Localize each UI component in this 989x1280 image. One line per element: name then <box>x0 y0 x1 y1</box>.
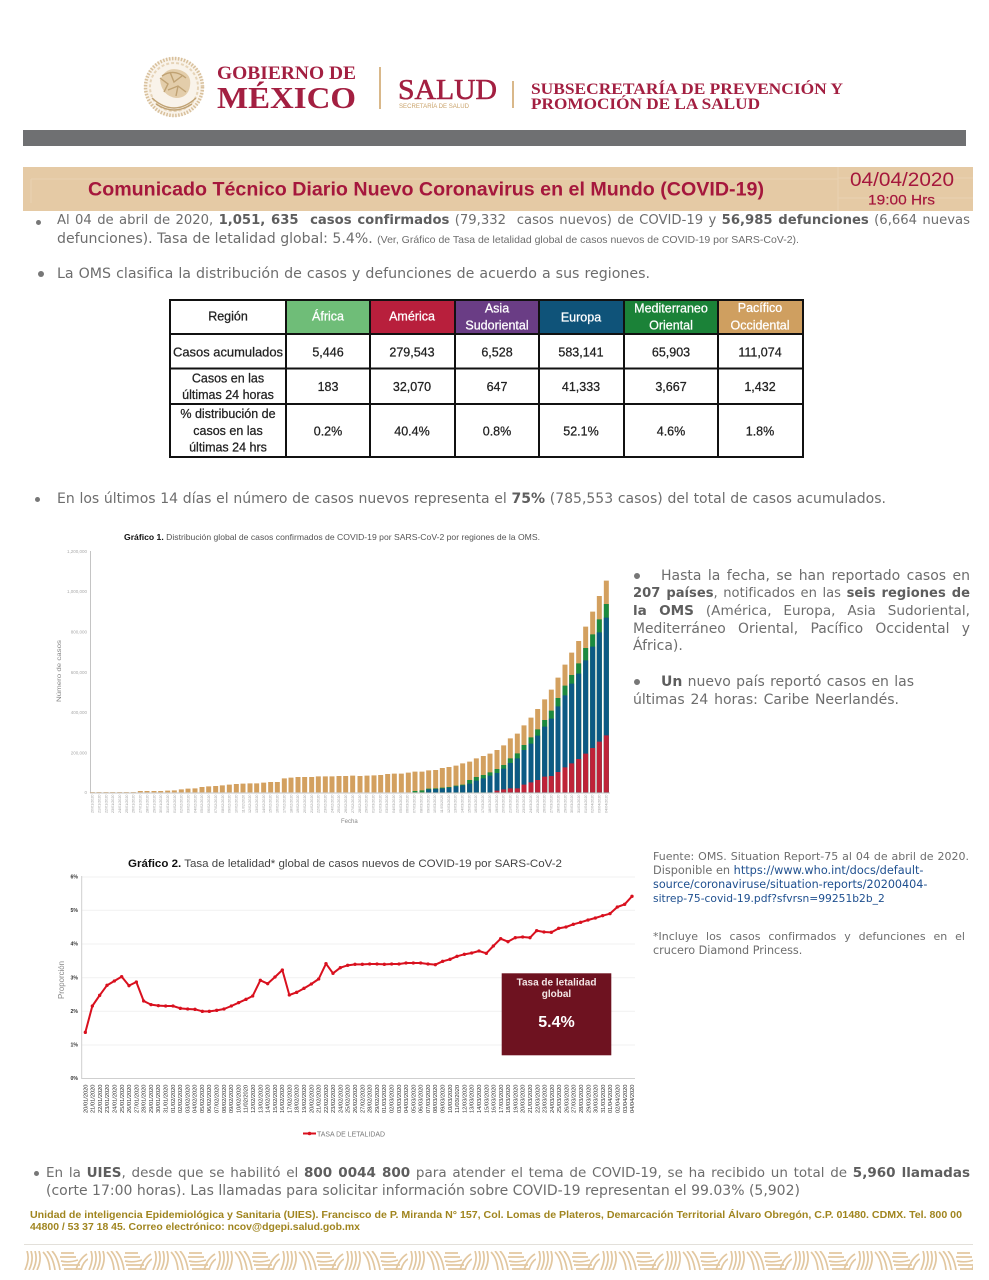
x axis date labels: 27/01/2020 <box>134 1085 140 1113</box>
x axis date labels: 23/03/2020 <box>543 1085 549 1113</box>
y axis labels: 600,000 <box>71 670 87 675</box>
x axis date labels: 25/03/2020 <box>557 1085 563 1113</box>
x axis date labels: 24/01/2020 <box>118 795 122 813</box>
gray bar <box>23 130 966 146</box>
x axis date labels: 22/03/2020 <box>535 1085 541 1113</box>
x axis date labels: 21/02/2020 <box>317 1085 323 1113</box>
x axis date labels: 18/02/2020 <box>289 795 293 813</box>
bullet text: global summary: Al 04 de abril de 2020, 1,051, 635 casos confirmados (79,332 casos nuevos) de COVID-19 y 56,985 defunciones (6,664 nuevas <box>57 213 970 228</box>
table header: Oriental <box>649 318 693 332</box>
x axis date labels: 24/02/2020 <box>330 795 334 813</box>
table row: casos acumulados: 583,141 <box>558 346 604 360</box>
footer: contact: 44800 / 53 37 18 45. Correo electrónico: ncov@dgepi.salud.gob.mx <box>30 1221 360 1233</box>
icon: national emblem <box>144 57 204 117</box>
x axis date labels: 29/01/2020 <box>149 1085 155 1113</box>
x axis date labels: 29/03/2020 <box>563 795 567 813</box>
x axis date labels: 15/02/2020 <box>269 795 273 813</box>
x axis date labels: 16/02/2020 <box>280 1085 286 1113</box>
logo: Gobierno de México: MÉXICO <box>217 80 356 115</box>
text block: source: Fuente: OMS. Situation Report-75 al 04 de abril de 2020. <box>653 850 969 863</box>
x axis date labels: 26/01/2020 <box>132 795 136 813</box>
x axis date labels: 14/02/2020 <box>266 1085 272 1113</box>
x axis date labels: 17/03/2020 <box>481 795 485 813</box>
x axis date labels: 29/02/2020 <box>365 795 369 813</box>
table row: casos acumulados <box>173 346 782 360</box>
x axis date labels: 21/01/2020 <box>91 1085 97 1113</box>
x axis date labels: 23/03/2020 <box>522 795 526 813</box>
x axis date labels: 06/02/2020 <box>207 795 211 813</box>
x axis date labels: 03/02/2020 <box>186 795 190 813</box>
x axis date labels: 30/01/2020 <box>156 1085 162 1113</box>
bullet text: OMS regions: La OMS clasifica la distribución de casos y defunciones de acuerdo a sus regiones. <box>57 266 650 282</box>
table row: casos acumulados: 279,543 <box>389 346 435 360</box>
x axis date labels: 04/02/2020 <box>193 795 197 813</box>
decorative band <box>24 1251 973 1270</box>
header logos <box>23 56 966 146</box>
x axis date labels: 12/03/2020 <box>447 795 451 813</box>
x axis date labels: 02/04/2020 <box>616 1085 622 1113</box>
x axis date labels: 29/01/2020 <box>152 795 156 813</box>
x axis date labels: 07/02/2020 <box>214 1085 220 1113</box>
x axis date labels: 16/03/2020 <box>474 795 478 813</box>
y axis labels: 6% <box>70 874 78 880</box>
x axis date labels: 11/03/2020 <box>440 795 444 813</box>
x axis date labels: 12/02/2020 <box>251 1085 257 1113</box>
x axis date labels: 24/02/2020 <box>338 1085 344 1113</box>
x axis date labels: 05/02/2020 <box>200 1085 206 1113</box>
x axis date labels: 30/03/2020 <box>594 1085 600 1113</box>
x axis date labels: 09/02/2020 <box>228 795 232 813</box>
table header: Sudoriental <box>465 318 529 332</box>
x axis date labels: 22/02/2020 <box>317 795 321 813</box>
x axis date labels: 07/03/2020 <box>413 795 417 813</box>
callout: global lethality: global <box>542 989 571 1000</box>
x axis date labels: 01/03/2020 <box>382 1085 388 1113</box>
x axis date labels <box>91 795 608 813</box>
text block: right column countries <box>633 568 970 654</box>
x axis date labels: 27/03/2020 <box>572 1085 578 1113</box>
x axis date labels: 05/03/2020 <box>399 795 403 813</box>
x axis date labels: 02/03/2020 <box>390 1085 396 1113</box>
callout: global lethality <box>502 973 611 1055</box>
x axis date labels: 18/03/2020 <box>488 795 492 813</box>
x axis date labels: 18/03/2020 <box>506 1085 512 1113</box>
x axis date labels: 20/03/2020 <box>502 795 506 813</box>
logo: Subsecretaría: SUBSECRETARÍA DE PREVENCIÓN Y <box>531 79 843 98</box>
x axis date labels: 11/02/2020 <box>241 795 245 813</box>
y axis labels: 2% <box>70 1009 78 1015</box>
x axis date labels <box>83 1085 636 1113</box>
x axis date labels: 31/01/2020 <box>164 1085 170 1113</box>
text block: source: source/coronaviruse/situation-reports/20200404- <box>653 878 927 891</box>
x axis date labels: 28/03/2020 <box>579 1085 585 1113</box>
table row: % distribución: casos en las <box>193 424 263 438</box>
x axis date labels: 30/01/2020 <box>159 795 163 813</box>
table header: África <box>312 308 344 324</box>
logo: Subsecretaría: PROMOCIÓN DE LA SALUD <box>531 94 760 113</box>
table row: últimas 24 horas: 183 <box>318 380 338 394</box>
table row: % distribución: 0.8% <box>483 424 511 438</box>
table: regions <box>169 299 804 458</box>
x axis date labels: 04/03/2020 <box>404 1085 410 1113</box>
x axis date labels: 10/02/2020 <box>236 1085 242 1113</box>
bullet text: UIES calls <box>34 1165 970 1199</box>
x axis date labels: 19/03/2020 <box>513 1085 519 1113</box>
table row: últimas 24 horas: 1,432 <box>744 380 776 394</box>
x axis date labels: 07/03/2020 <box>426 1085 432 1113</box>
x axis date labels: 11/03/2020 <box>455 1085 461 1113</box>
x axis date labels: 08/03/2020 <box>419 795 423 813</box>
x axis date labels: 22/03/2020 <box>515 795 519 813</box>
x axis date labels: 28/02/2020 <box>368 1085 374 1113</box>
x axis title: Fecha <box>341 819 358 825</box>
x axis date labels: 03/03/2020 <box>385 795 389 813</box>
table row: casos acumulados: 5,446 <box>312 346 344 360</box>
text block: right column countries: la OMS (América, Europa, Asia Sudoriental, <box>633 603 970 619</box>
x axis date labels: 12/02/2020 <box>248 795 252 813</box>
x axis date labels: 01/02/2020 <box>173 795 177 813</box>
x axis date labels: 29/03/2020 <box>586 1085 592 1113</box>
x axis date labels: 26/01/2020 <box>127 1085 133 1113</box>
x axis date labels: 29/02/2020 <box>375 1085 381 1113</box>
text block: source <box>653 850 969 905</box>
table row: últimas 24 horas: Casos en las <box>192 372 264 386</box>
x axis date labels: 31/03/2020 <box>577 795 581 813</box>
x axis date labels: 27/02/2020 <box>351 795 355 813</box>
x axis date labels: 08/02/2020 <box>222 1085 228 1113</box>
text block: right column new country <box>633 674 914 708</box>
x axis date labels: 06/02/2020 <box>207 1085 213 1113</box>
x axis date labels: 15/03/2020 <box>467 795 471 813</box>
text block: right column countries: Mediterráneo Oriental, Pacífico Occidental y <box>633 621 970 637</box>
x axis date labels: 24/03/2020 <box>550 1085 556 1113</box>
logo: Subsecretaría <box>531 79 843 113</box>
y axis title: Número de casos <box>56 639 63 702</box>
bullet text: UIES calls: En la UIES, desde que se habilitó el 800 0044 800 para atender el tema de COVID-19, se ha recibido un total de 5,960 llamadas <box>46 1165 970 1181</box>
table row: % distribución: % distribución de <box>180 407 276 421</box>
x axis date labels: 05/03/2020 <box>411 1085 417 1113</box>
x axis date labels: 13/02/2020 <box>258 1085 264 1113</box>
x axis date labels: 24/03/2020 <box>529 795 533 813</box>
text block: right column new country: últimas 24 horas: Caribe Neerlandés. <box>633 692 899 708</box>
x axis date labels: 30/03/2020 <box>570 795 574 813</box>
x axis date labels: 10/03/2020 <box>448 1085 454 1113</box>
x axis date labels: 23/02/2020 <box>324 795 328 813</box>
chart title: Gráfico 2. Tasa de letalidad* global de casos nuevos de COVID-19 por SARS-CoV-2 <box>128 858 562 870</box>
text block: right column new country: Un nuevo país reportó casos en las <box>661 674 914 690</box>
x axis date labels: 22/01/2020 <box>98 1085 104 1113</box>
x axis date labels: 23/02/2020 <box>331 1085 337 1113</box>
x axis date labels: 20/01/2020 <box>91 795 95 813</box>
chart title: Gráfico 1. Distribución global de casos confirmados de COVID-19 por SARS-CoV-2 por regiones de la OMS. <box>124 532 540 542</box>
y axis title: Proporción <box>57 961 66 999</box>
x axis date labels: 07/02/2020 <box>214 795 218 813</box>
table header: Región <box>208 310 248 324</box>
x axis date labels: 25/02/2020 <box>337 795 341 813</box>
text block: footnote: *Incluye los casos confirmados y defunciones en el <box>653 930 965 943</box>
x axis date labels: 11/02/2020 <box>244 1085 250 1113</box>
x axis date labels: 16/03/2020 <box>492 1085 498 1113</box>
table row: casos acumulados: 65,903 <box>652 346 690 360</box>
x axis date labels: 06/03/2020 <box>406 795 410 813</box>
table row: % distribución: 4.6% <box>657 424 685 438</box>
x axis date labels: 17/02/2020 <box>282 795 286 813</box>
x axis date labels: 18/02/2020 <box>295 1085 301 1113</box>
x axis date labels: 20/02/2020 <box>309 1085 315 1113</box>
footer: contact: Unidad de inteligencia Epidemiológica y Sanitaria (UIES). Francisco de P. Miranda N° 157, Col. Lomas de Plateros, Demarcación Territorial Álvaro Obregón, C.P. 01480. CDMX. Tel. 800 00 <box>30 1208 962 1221</box>
x axis date labels: 20/01/2020 <box>83 1085 89 1113</box>
title band <box>23 167 973 211</box>
logo: Salud: SALUD <box>398 74 497 106</box>
title: Comunicado Técnico Diario Nuevo Coronavirus en el Mundo (COVID-19) <box>88 178 764 200</box>
x axis date labels: 27/03/2020 <box>550 795 554 813</box>
x axis date labels: 03/02/2020 <box>185 1085 191 1113</box>
x axis date labels: 03/04/2020 <box>598 795 602 813</box>
x axis date labels: 10/02/2020 <box>234 795 238 813</box>
x axis date labels: 13/03/2020 <box>454 795 458 813</box>
table row: % distribución: 40.4% <box>394 424 430 438</box>
x axis date labels: 09/03/2020 <box>440 1085 446 1113</box>
x axis date labels: 19/02/2020 <box>302 1085 308 1113</box>
y axis labels: 3% <box>70 975 78 981</box>
y axis labels <box>67 549 87 795</box>
x axis date labels: 14/02/2020 <box>262 795 266 813</box>
table header <box>208 301 790 332</box>
date: 04/04/2020 <box>850 170 954 191</box>
x axis date labels: 01/04/2020 <box>608 1085 614 1113</box>
x axis date labels: 21/02/2020 <box>310 795 314 813</box>
x axis date labels: 28/01/2020 <box>142 1085 148 1113</box>
table row: casos acumulados: 6,528 <box>481 346 513 360</box>
table row: % distribución: 52.1% <box>563 424 599 438</box>
x axis date labels: 01/04/2020 <box>584 795 588 813</box>
table row: últimas 24 horas: 3,667 <box>655 380 687 394</box>
x axis date labels: 26/03/2020 <box>564 1085 570 1113</box>
table header: Occidental <box>730 318 790 332</box>
x axis date labels: 23/01/2020 <box>105 1085 111 1113</box>
logo: Gobierno de México <box>217 63 356 115</box>
table header: Pacífico <box>738 301 782 315</box>
x axis date labels: 02/02/2020 <box>178 1085 184 1113</box>
time: 19:00 Hrs <box>868 192 935 208</box>
x axis date labels: 08/02/2020 <box>221 795 225 813</box>
x axis date labels: 23/01/2020 <box>111 795 115 813</box>
x axis date labels: 28/02/2020 <box>358 795 362 813</box>
x axis date labels: 14/03/2020 <box>477 1085 483 1113</box>
text block: source: sitrep-75-covid-19.pdf?sfvrsn=99251b2b_2 <box>653 892 885 905</box>
x axis date labels: 03/04/2020 <box>623 1085 629 1113</box>
x axis date labels: 01/02/2020 <box>171 1085 177 1113</box>
x axis date labels: 15/02/2020 <box>273 1085 279 1113</box>
x axis date labels: 04/02/2020 <box>193 1085 199 1113</box>
text block: source: Disponible en https://www.who.int/docs/default- <box>653 864 923 877</box>
x axis date labels: 31/01/2020 <box>166 795 170 813</box>
y axis labels: 0% <box>70 1076 78 1082</box>
text block: right column countries: Hasta la fecha, se han reportado casos en <box>661 568 970 584</box>
x axis date labels: 25/01/2020 <box>125 795 129 813</box>
callout: global lethality: Tasa de letalidad <box>517 978 596 988</box>
x axis date labels: 16/02/2020 <box>276 795 280 813</box>
x axis date labels: 14/03/2020 <box>460 795 464 813</box>
x axis date labels: 21/03/2020 <box>528 1085 534 1113</box>
table row: últimas 24 horas: 41,333 <box>562 380 600 394</box>
x axis date labels: 05/02/2020 <box>200 795 204 813</box>
x axis date labels: 28/03/2020 <box>556 795 560 813</box>
table row: % distribución: 0.2% <box>314 424 342 438</box>
table row: últimas 24 horas <box>182 372 776 402</box>
x axis date labels: 25/03/2020 <box>536 795 540 813</box>
y axis labels: 1,000,000 <box>67 589 87 594</box>
x axis date labels: 04/03/2020 <box>392 795 396 813</box>
x axis date labels: 27/02/2020 <box>360 1085 366 1113</box>
x axis date labels: 27/01/2020 <box>139 795 143 813</box>
table header: Europa <box>561 310 601 324</box>
table header: América <box>389 310 435 324</box>
table row: casos acumulados: Casos acumulados <box>173 346 283 360</box>
bullet text: global summary: defunciones). Tasa de letalidad global: 5.4%. (Ver, Gráfico de Tasa de letalidad global de casos nuevos de COVID-19 por SARS-CoV-2). <box>57 231 799 247</box>
table row: % distribución: últimas 24 hrs <box>189 440 267 454</box>
x axis date labels: 04/04/2020 <box>604 795 608 813</box>
x axis date labels: 22/02/2020 <box>324 1085 330 1113</box>
x axis date labels: 20/03/2020 <box>521 1085 527 1113</box>
table row: últimas 24 horas: 647 <box>487 380 507 394</box>
x axis date labels: 03/03/2020 <box>397 1085 403 1113</box>
x axis date labels: 01/03/2020 <box>372 795 376 813</box>
table row: % distribución <box>180 407 774 454</box>
logo: Gobierno de México: GOBIERNO DE <box>217 63 356 84</box>
x axis date labels: 09/03/2020 <box>426 795 430 813</box>
divider <box>379 67 381 109</box>
text block: right column countries: 207 países, notificados en las seis regiones de <box>633 586 970 601</box>
x axis date labels: 02/02/2020 <box>180 795 184 813</box>
x axis date labels: 12/03/2020 <box>462 1085 468 1113</box>
bullet text: UIES calls: (corte 17:00 horas). Las llamadas para solicitar información sobre COVID-19 representan el 99.03% (5,902) <box>46 1183 800 1199</box>
x axis date labels: 19/03/2020 <box>495 795 499 813</box>
y axis labels: 800,000 <box>71 630 87 634</box>
x axis date labels: 25/01/2020 <box>120 1085 126 1113</box>
x axis date labels: 20/02/2020 <box>303 795 307 813</box>
x axis date labels: 06/03/2020 <box>419 1085 425 1113</box>
text block: footnote <box>653 930 965 957</box>
table row: % distribución: 1.8% <box>746 424 774 438</box>
table row: últimas 24 horas: últimas 24 horas <box>182 388 274 402</box>
lethality rate line <box>85 896 632 1032</box>
x axis date labels: 21/03/2020 <box>508 795 512 813</box>
bars <box>92 581 606 792</box>
x axis date labels: 22/01/2020 <box>104 795 108 813</box>
x axis date labels: 04/04/2020 <box>630 1085 636 1113</box>
divider <box>512 81 514 108</box>
table row: casos acumulados: 111,074 <box>738 346 782 360</box>
table header: Asia <box>485 302 509 316</box>
x axis date labels: 28/01/2020 <box>145 795 149 813</box>
legend: TASA DE LETALIDAD <box>317 1130 386 1138</box>
x axis date labels: 17/02/2020 <box>287 1085 293 1113</box>
x axis date labels: 08/03/2020 <box>433 1085 439 1113</box>
text block: right column countries: África). <box>633 638 683 654</box>
x axis date labels: 26/02/2020 <box>353 1085 359 1113</box>
x axis date labels: 19/02/2020 <box>296 795 300 813</box>
bullet text: global summary <box>36 213 970 247</box>
table row: últimas 24 horas: 32,070 <box>393 380 431 394</box>
text block: footnote: crucero Diamond Princess. <box>653 944 802 957</box>
x axis date labels: 24/01/2020 <box>112 1085 118 1113</box>
x axis date labels: 26/03/2020 <box>543 795 547 813</box>
table header: Mediterraneo <box>634 302 708 316</box>
y axis labels: 1,200,000 <box>67 549 87 554</box>
x axis date labels: 17/03/2020 <box>499 1085 505 1113</box>
x axis date labels: 13/03/2020 <box>470 1085 476 1113</box>
x axis date labels: 02/03/2020 <box>378 795 382 813</box>
y axis labels: 0 <box>84 790 87 795</box>
bullet text: last 14 days: En los últimos 14 días el número de casos nuevos representa el 75% (785,553 casos) del total de casos acumulados. <box>57 491 886 507</box>
y axis labels: 200,000 <box>71 750 87 756</box>
x axis date labels: 26/02/2020 <box>344 795 348 813</box>
x axis date labels: 15/03/2020 <box>484 1085 490 1113</box>
x axis date labels: 21/01/2020 <box>98 795 102 813</box>
y axis labels <box>70 874 78 1082</box>
x axis date labels: 31/03/2020 <box>601 1085 607 1113</box>
x axis date labels: 02/04/2020 <box>591 795 595 813</box>
logo: Salud: SECRETARÍA DE SALUD <box>399 103 470 110</box>
callout: global lethality: 5.4% <box>538 1014 575 1031</box>
chart: Gráfico 1 stacked bars <box>56 532 610 825</box>
x axis date labels: 25/02/2020 <box>346 1085 352 1113</box>
x axis date labels: 13/02/2020 <box>255 795 259 813</box>
y axis labels: 1% <box>70 1043 78 1049</box>
x axis date labels: 10/03/2020 <box>433 795 437 813</box>
x axis date labels: 09/02/2020 <box>229 1085 235 1113</box>
y axis labels: 5% <box>70 908 78 914</box>
y axis labels: 4% <box>70 942 78 948</box>
y axis labels: 400,000 <box>71 710 87 715</box>
